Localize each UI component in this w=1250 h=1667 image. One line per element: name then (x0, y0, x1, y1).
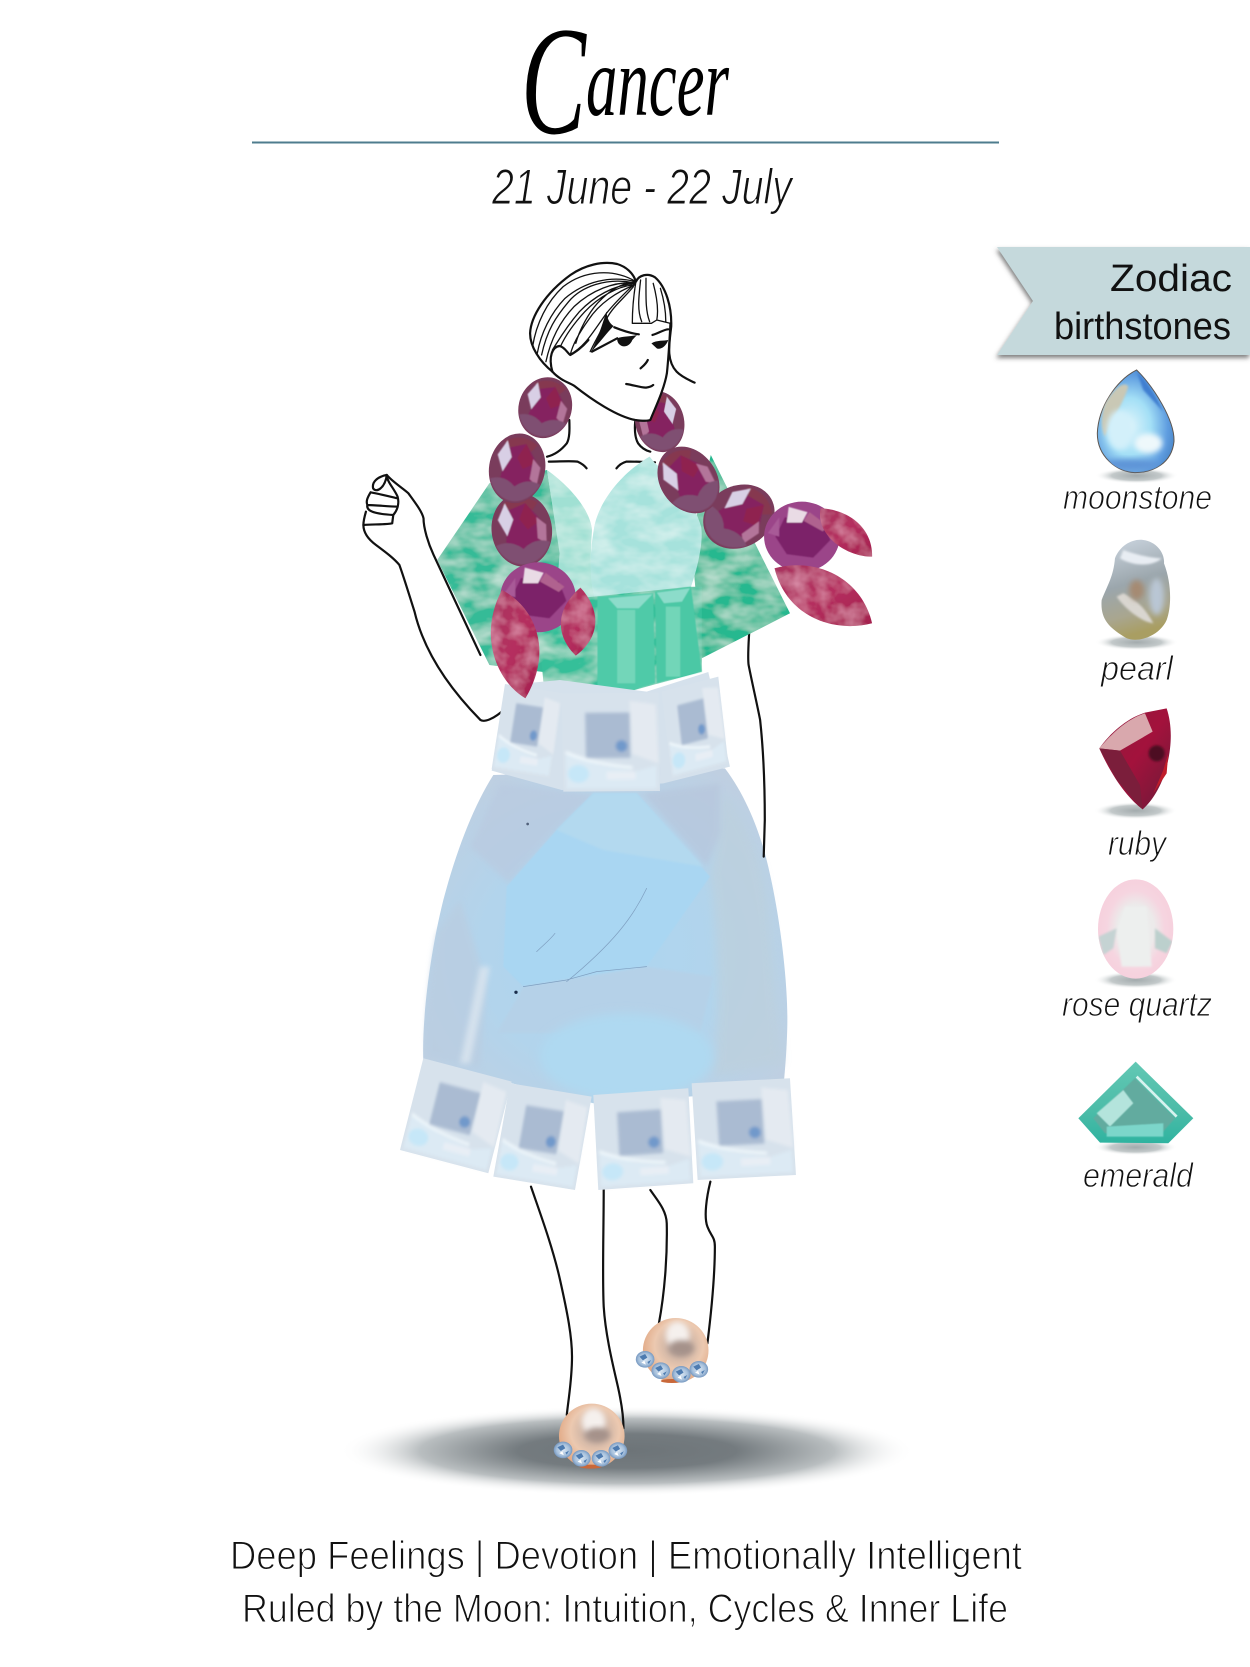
title: C (521, 0, 587, 167)
nose and mouth (626, 360, 653, 388)
pearl shoes (554, 1318, 709, 1469)
label: moonstone: moonstone (1063, 479, 1212, 517)
tagline: Ruled by the Moon: Intuition, Cycles & Inner Life (242, 1587, 1008, 1631)
banner label (1054, 258, 1232, 348)
skirt hem: moonstone squares (400, 1058, 796, 1190)
waistband: moonstone squares (492, 672, 730, 792)
tagline (230, 1534, 1022, 1631)
banner: Zodiac birthstones (997, 247, 1250, 355)
gem: pearl (1101, 540, 1172, 649)
gem: moonstone (1095, 370, 1178, 484)
label: rose quartz: rose quartz (1062, 986, 1212, 1024)
hair (530, 263, 695, 383)
banner label: Zodiac (1110, 258, 1232, 300)
title: ancer (586, 26, 730, 137)
right shoe pearl (636, 1318, 709, 1383)
gem: rose quartz (1098, 879, 1174, 988)
ruby necklace (484, 373, 872, 698)
banner ribbon (997, 247, 1250, 355)
title divider (252, 142, 999, 144)
bodice panels (597, 587, 702, 692)
legs (531, 1182, 715, 1428)
head: hair and face line art (530, 263, 695, 421)
lapels (547, 457, 702, 600)
moonstone skirt (423, 768, 787, 1103)
jaw (552, 323, 670, 421)
tagline: Deep Feelings | Devotion | Emotionally Intelligent (230, 1534, 1022, 1578)
ground shadow (339, 1406, 915, 1496)
gem: emerald (1078, 1062, 1193, 1155)
eyes and brows (617, 335, 637, 346)
banner label: birthstones (1054, 306, 1231, 348)
left shoe pearl (554, 1404, 627, 1469)
label: emerald: emerald (1083, 1157, 1194, 1195)
arms and neck outline (363, 420, 765, 857)
label: pearl: pearl (1100, 650, 1174, 688)
sleeves (437, 455, 790, 692)
label: ruby: ruby (1108, 825, 1168, 863)
face (552, 323, 670, 421)
figure: woman in gemstone outfit (339, 263, 915, 1496)
emerald top (437, 455, 790, 692)
gem: ruby (1094, 708, 1177, 819)
date range: 21 June - 22 July (491, 159, 794, 215)
